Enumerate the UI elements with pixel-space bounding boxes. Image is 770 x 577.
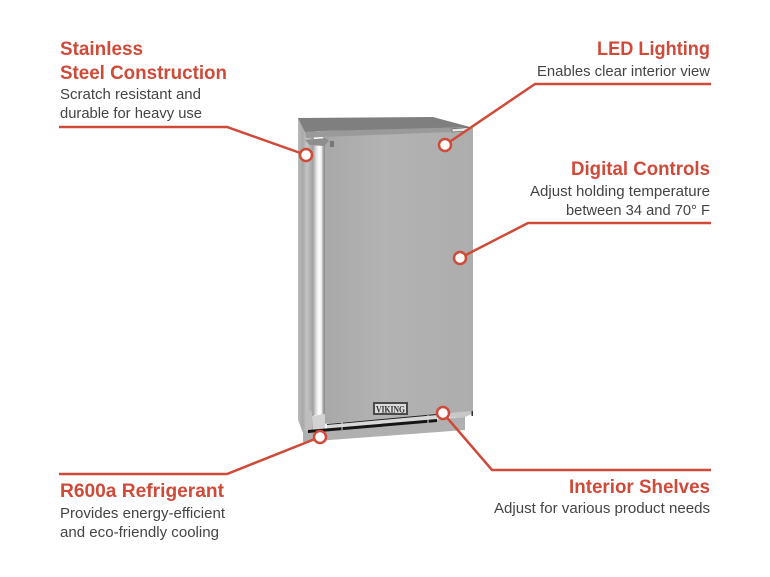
marker <box>437 407 449 419</box>
marker <box>439 139 451 151</box>
callout: digital controls <box>454 158 711 264</box>
marker <box>454 252 466 264</box>
Viking badge <box>373 402 408 415</box>
handle bottom mount <box>312 414 325 431</box>
door hinge screw <box>330 141 334 147</box>
right edge strip <box>450 411 472 418</box>
heading: R600a Refrigerant <box>60 480 224 502</box>
callout: R600a refrigerant <box>59 431 326 541</box>
cabinet side <box>298 118 314 433</box>
right tick <box>472 411 473 416</box>
leader line <box>59 127 306 155</box>
description: between 34 and 70° F <box>566 203 710 219</box>
description: durable for heavy use <box>60 106 202 122</box>
LED light slot <box>452 128 469 132</box>
handle top mount <box>305 138 329 146</box>
heading: Stainless <box>60 38 143 60</box>
description: Adjust for various product needs <box>494 501 710 517</box>
top front edge <box>305 127 470 138</box>
upper slot line <box>327 414 437 424</box>
slot marks <box>342 415 428 430</box>
heading: Steel Construction <box>60 62 227 84</box>
door panel <box>323 128 473 424</box>
description <box>60 506 225 541</box>
heading: Digital Controls <box>571 158 710 180</box>
callout: interior shelves <box>437 407 711 517</box>
marker <box>300 149 312 161</box>
leader line <box>59 437 320 474</box>
leader line <box>445 84 711 145</box>
description: Enables clear interior view <box>537 64 711 80</box>
top panel <box>298 117 470 132</box>
callout: stainless steel construction <box>59 38 312 161</box>
heading: LED Lighting <box>597 38 710 60</box>
description: Scratch resistant and <box>60 87 201 103</box>
marker <box>314 431 326 443</box>
description: Adjust holding temperature <box>530 184 710 200</box>
description: Provides energy-efficient <box>60 506 225 522</box>
door handle <box>313 145 325 415</box>
refrigerator <box>298 117 473 442</box>
handle bracket <box>305 407 312 431</box>
leader line <box>443 413 711 470</box>
leader line <box>460 223 711 258</box>
description <box>60 87 202 122</box>
ventilation slot <box>308 419 437 433</box>
description: and eco-friendly cooling <box>60 525 219 541</box>
callout: LED lighting <box>439 38 711 151</box>
kick plate <box>303 417 465 442</box>
door bottom edge strip <box>327 415 437 428</box>
heading <box>60 38 227 84</box>
Viking badge: VIKING <box>376 404 405 414</box>
heading: Interior Shelves <box>569 476 710 498</box>
description <box>530 184 710 219</box>
